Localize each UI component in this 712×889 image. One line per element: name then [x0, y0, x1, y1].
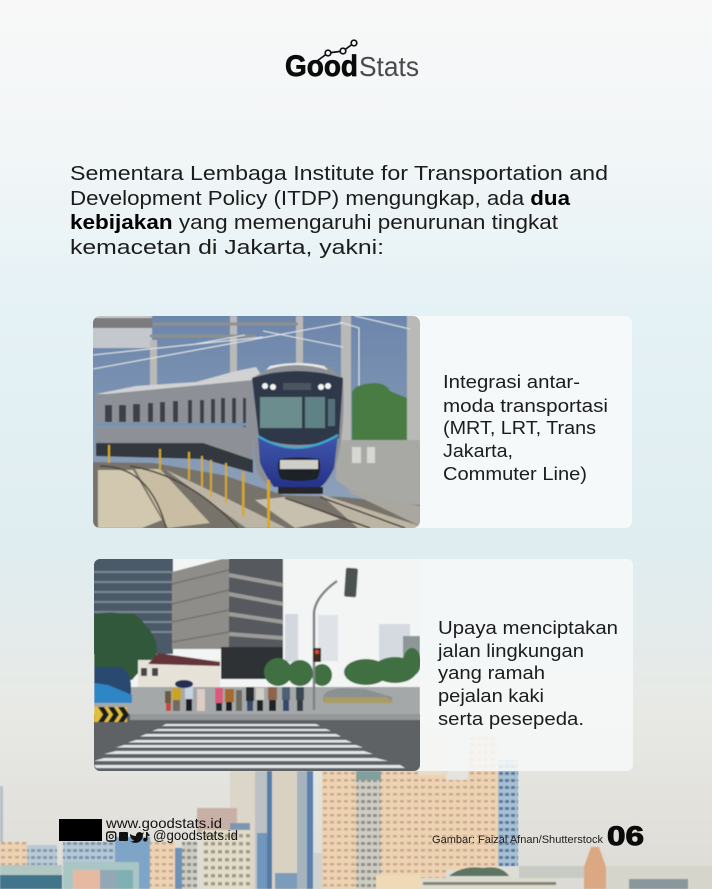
- card caption: Upaya menciptakan: [438, 618, 618, 638]
- trees: [94, 612, 157, 680]
- intro text: [70, 162, 608, 259]
- zebra crossing: [94, 724, 405, 768]
- card caption: Integrasi antar-: [443, 372, 580, 392]
- card caption: yang ramah: [438, 663, 545, 683]
- card caption: Commuter Line): [443, 464, 587, 484]
- fence and street background: [94, 687, 420, 714]
- intro text: Sementara Lembaga Institute for Transportation and: [70, 162, 608, 185]
- skyline background: [0, 730, 712, 889]
- tree: [352, 383, 407, 440]
- pedestrians: [165, 680, 304, 711]
- card caption: Jakarta,: [443, 441, 513, 461]
- small building: [138, 660, 220, 690]
- yellow posts: [108, 445, 270, 528]
- card background: [94, 559, 633, 771]
- footer: black block: [59, 819, 102, 841]
- card caption: pejalan kaki: [438, 686, 544, 706]
- card caption: [437, 618, 618, 729]
- logo: Stats wordmark: Stats: [359, 51, 419, 82]
- train front: [252, 363, 344, 487]
- intro text: kebijakan yang memengaruhi penurunan tingkat: [70, 211, 558, 234]
- intro text: Development Policy (ITDP) mengungkap, ada dua: [70, 187, 571, 210]
- card background: [93, 316, 632, 528]
- bus: [94, 666, 132, 696]
- card caption: [443, 372, 608, 484]
- logo: rising line icon: [317, 40, 357, 61]
- parked cars: [323, 688, 392, 701]
- wall: [336, 440, 420, 512]
- road: [91, 714, 423, 774]
- panel: pedestrian streets: [91, 556, 633, 774]
- page number: 06: [607, 821, 644, 851]
- intro text: kemacetan di Jakarta, yakni:: [70, 236, 384, 259]
- footer: social icons: [107, 832, 150, 843]
- footer: website: www.goodstats.id: [105, 815, 222, 831]
- logo: Good wordmark: Good: [285, 50, 358, 83]
- card caption: moda transportasi: [443, 396, 608, 416]
- photo: MRT train: [90, 313, 423, 531]
- photo: pedestrian crossing: [91, 556, 423, 774]
- card caption: (MRT, LRT, Trans: [443, 418, 596, 438]
- image credit: Gambar: Faizal Afnan/Shutterstock: [432, 834, 603, 846]
- train body side: [96, 378, 253, 460]
- logo: [285, 40, 419, 83]
- traffic light pole: [314, 581, 337, 710]
- card caption: jalan lingkungan: [437, 641, 584, 661]
- panel: transport integration: [90, 313, 632, 531]
- card caption: serta pesepeda.: [438, 709, 584, 729]
- barrier on sidewalk: [324, 697, 394, 703]
- tracks: [93, 462, 420, 531]
- footer: social handle: @goodstats.id: [153, 827, 238, 843]
